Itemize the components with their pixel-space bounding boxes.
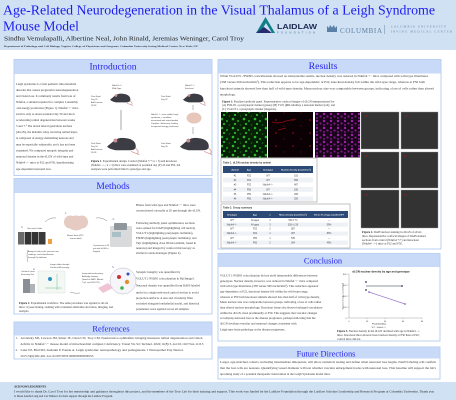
- panel: results: [218, 60, 441, 249]
- methods text: VGLUT1 /PSD95 colocalization in Fiji/ImageJ.: [136, 276, 195, 280]
- workflow step numbers: [21, 212, 115, 271]
- panel: future directions: [218, 347, 440, 379]
- table 2: group summary: P50: [253, 238, 258, 240]
- workflow step numbers: 2.: [112, 218, 115, 221]
- methods text: [136, 203, 201, 311]
- workflow labels: Mouse brain (P22: [67, 234, 84, 237]
- table 2: group summary: WT: [230, 229, 234, 231]
- mouse labels: Ndufs4 +/+: [112, 85, 123, 87]
- heading: methods: Methods: [96, 182, 130, 192]
- table 2: group summary: KO as % of age-matched WT: [314, 214, 344, 216]
- workflow labels: Tuj1, and VGLUT1): [82, 282, 100, 284]
- table 2: group summary: —: [328, 238, 331, 240]
- table 1: nuclear density by animal: Ndufs4−/−: [263, 199, 274, 201]
- table 2: group summary: 83%: [327, 233, 331, 235]
- heading: introduction: Introduction: [90, 62, 137, 72]
- authors: Sindhu Vemulapalli, Albertine Neal, John Rinald, Jeremias Weninger, Carol Troy: [4, 36, 245, 42]
- step 4 microscope: [23, 279, 30, 293]
- workflow step numbers: 4.: [33, 268, 35, 271]
- reference list: deficits in Ndufs4−/− mouse model of mitochondrial complex I deficiency. Transl Vis Sci Technol. 2022;11(8):3. doi:10.1167/tvst.11.8.3: [20, 342, 204, 346]
- figure 5 caption: mice. Knockout mice showed lower nuclear density at P50 than at P22;: [337, 333, 420, 337]
- workflow labels: Cryosection at 20: [93, 244, 110, 247]
- heading: future directions: Future Directions: [297, 350, 355, 358]
- figure 5: nuclear density line chart: 600: [343, 285, 347, 287]
- mouse labels: Knockout: [185, 87, 194, 90]
- control mouse P22: [110, 94, 133, 105]
- reference list: Lake NJ, Bird MJ, Isohanni P, Paetau A. Leigh syndrome: neuropathology and pathogenesis. J Neuropathol Exp Neurol.: [20, 348, 184, 353]
- conclusion text: than altered nuclear morphology. Knockout tissue also showed enlarged vasculature: [220, 306, 323, 310]
- workflow labels: Confocal Laser: [21, 270, 35, 273]
- knockout mouse P50: [180, 138, 212, 155]
- table 2: group summary: All ages: [251, 219, 260, 222]
- brain icon: [186, 112, 202, 124]
- mouse labels: Post Natal: [161, 142, 171, 145]
- figure 5: nuclear density line chart: 200: [343, 307, 347, 309]
- workflow labels: Image slides through: [50, 263, 70, 266]
- reference list: 2.: [16, 348, 18, 352]
- heading: conclusion: Conclusion: [304, 256, 343, 266]
- methods text: Tuj1 (highlighting class III beta-tubulin, found in: [136, 241, 197, 246]
- mouse labels: Adult mouse: [91, 148, 103, 151]
- table 2: group summary: Table 2. Group summary: [223, 206, 253, 210]
- logo: Columbia University Irving Medical Center: COLUMBIA: [340, 27, 382, 35]
- table 2: group summary: 49%: [327, 242, 331, 244]
- methods text: VGLUT1 (highlighting presynaptic terminals),: [136, 231, 193, 236]
- figure 4 caption: (Ndufs4 −/−) mice at P22 and P50.: [362, 242, 403, 246]
- table 1: nuclear density by animal: #1: [234, 176, 237, 178]
- figure 4 caption: [362, 230, 426, 246]
- step 2 cryostat: [110, 226, 132, 247]
- conclusion text: whereas at P50 both knockout animals showed less than half of wild-type density.: [220, 295, 320, 299]
- table 2: group summary: 3: [269, 220, 271, 222]
- table 2: group summary: 587: [291, 229, 296, 231]
- affiliation: Department of Pathology and Cell Biology, Vagelos College of Physicians and Surgeons, Columbia University Irving Medical Center, New York, NY: [4, 45, 198, 48]
- intro text: (dLGN), the thalamic relay receiving retinal input,: [16, 130, 78, 135]
- table 1: nuclear density by animal: Nuclear density (nuclei/mm²): [281, 168, 311, 172]
- logo: Columbia University Irving Medical Center: [327, 24, 452, 35]
- future directions text: that the lost cells are neurons. Quantifying vessel diameter will test whether vascular enlargement tracks with neuronal loss. This baseline will support the lab's: [220, 366, 437, 370]
- conclusion text: [220, 274, 323, 332]
- methods text: projection artifacts. A size and circularity filter: [136, 296, 193, 300]
- intro text: Ndufs4−/− mice at P22 and P50, hypothesizing: [16, 160, 74, 165]
- knockout mouse P22: [183, 94, 206, 105]
- methods text: nuclei in a single mid-stack optical section to avoid: [136, 290, 199, 294]
- mouse labels: Adult mouse: [91, 101, 103, 104]
- arrow: knockout timeline: [192, 105, 194, 134]
- logo: Columbia University Irving Medical Center: COLUMBIA UNIVERSITY: [391, 24, 447, 28]
- table 2: group summary: P22: [253, 229, 258, 231]
- acknowledgments band: to Dean Ariella Lang and Cat Wallace for their support through the Laidlaw Program.: [14, 394, 113, 398]
- figure 5: nuclear density line chart: 80: [421, 321, 424, 323]
- figure 3 caption: (A) PSD-95, a postsynaptic marker (green); (B) TUJ1 (βIII-tubulin), a neuronal marker (red); and: [222, 103, 335, 107]
- intro text: is composed of energy-demanding neurons and: [16, 136, 74, 140]
- step 3 antibody staining: [110, 268, 136, 294]
- table 2: group summary: 1: [269, 233, 271, 235]
- intro text: Ndufs4, a subunit required for complex I assembly: [16, 100, 78, 105]
- step 3 slide: [98, 283, 113, 293]
- table 2: group summary: WT: [230, 238, 234, 240]
- table 1: nuclear density by animal: P50: [247, 194, 252, 196]
- mouse labels: Post Natal: [91, 95, 101, 98]
- table 1: nuclear density by animal: #6: [234, 199, 237, 201]
- figure 1 caption: [91, 159, 180, 171]
- title: Mouse Model: [3, 18, 79, 34]
- mouse labels: Post Natal: [91, 142, 101, 145]
- table 2: group summary: P22: [253, 233, 258, 235]
- figure 5: nuclear density line chart: 400: [343, 296, 347, 298]
- conclusion text: Leigh-type brain pathology as the disease progresses.: [220, 328, 285, 332]
- conclusion text: VGLUT1 /PSD95 colocalization did not yield interpretable differences between: [220, 274, 318, 278]
- intro text: 5 and 7.¹ The dorsal lateral geniculate nucleus: [16, 124, 73, 128]
- logo: Laidlaw Foundation: [256, 17, 317, 34]
- conclusion text: dLGN develops vascular and neuronal changes consistent with: [220, 322, 297, 326]
- figure 4 caption: mice. Representative confocal images of DAPI-stained: [362, 234, 426, 238]
- table 1: nuclear density by animal: #4: [234, 190, 237, 192]
- table 2: group summary: 2: [269, 229, 271, 231]
- results text: While VGLUT1 /PSD95 colocalization showed no interpretable results, nuclear density was reduced in Ndufs4−/− mice compared with wild-type littermates: [220, 74, 429, 79]
- methods text: Neuronal density was quantified from DAPI-labeled: [136, 284, 200, 288]
- intro text: Leigh syndrome is a fatal pediatric mitochondrial: [16, 82, 76, 86]
- title: [3, 2, 435, 34]
- step 5 image panels: [18, 232, 24, 244]
- table 1: nuclear density by animal: P22: [247, 180, 252, 182]
- mouse labels: associated with mitochondrial: [151, 119, 179, 122]
- methods text: neurons) and imaged by confocal microscopy as: [136, 246, 196, 250]
- control mouse P50: [107, 138, 139, 155]
- table 1: nuclear density by animal: Ndufs4−/−: [263, 194, 274, 196]
- intro text: and vision loss. It commonly results from loss of: [16, 94, 76, 98]
- figure 5: nuclear density line chart: WT · Ndufs4−/−: [372, 327, 387, 329]
- table 2: group summary: WT: [230, 220, 234, 222]
- intro text: and energy production (Figure 1). Ndufs4−/− mice: [16, 106, 79, 110]
- figure 2 caption: mice: cryosectioning, staining with consistent antibodies and ratios, imaging, and: [19, 305, 114, 309]
- table 1: nuclear density by animal: WT: [266, 190, 270, 192]
- table 2: group summary: 487: [291, 233, 296, 235]
- table 2: group summary: Genotype: [227, 214, 238, 216]
- table 1: nuclear density by animal: Age: [247, 168, 252, 172]
- table 2: group summary: 569 ± 73: [289, 220, 298, 222]
- mouse labels: Day 22: [161, 99, 168, 101]
- table 2: group summary: [221, 204, 350, 248]
- figure 2: workflow: [18, 212, 136, 313]
- conclusion text: Mean nuclear size was comparable between groups, indicating a loss of cells rather: [220, 300, 321, 305]
- workflow labels: Antibody staining: [82, 275, 99, 278]
- conclusion text: genotypes. Nuclear density, however, was reduced in Ndufs4−/− mice compared: [220, 279, 319, 284]
- table 1: nuclear density by animal: Table 1. dLGN nuclear density by animal: [223, 162, 271, 164]
- workflow arrows: [27, 218, 107, 293]
- acknowledgments band: ACKNOWLEDGMENTS: [14, 384, 47, 388]
- table 1: nuclear density by animal: Animal: [231, 168, 239, 172]
- mouse labels: Ndufs4 −/− mice exhibit Leigh: [151, 113, 179, 116]
- table 1: nuclear density by animal: Ndufs4−/−: [263, 185, 274, 187]
- workflow labels: through Fiji software: [28, 256, 48, 259]
- figure 3 caption: (C) VGLUT1, a presynaptic marker (magenta).: [222, 107, 277, 111]
- table 1: nuclear density by animal: 259: [294, 199, 299, 201]
- panel: introduction: [14, 60, 212, 176]
- methods text: cryosectioned coronally at 20 µm through the dLGN.: [136, 208, 201, 212]
- workflow labels: Scanning Unit: [21, 273, 34, 276]
- table 1: nuclear density by animal: 658: [294, 180, 299, 182]
- table 1: nuclear density by animal: 268: [294, 194, 299, 196]
- panel: references: [14, 322, 212, 359]
- table 1: nuclear density by animal: #3: [234, 185, 237, 187]
- table 2: group summary: 59%: [327, 224, 331, 226]
- methods text: were stained for DAPI (highlighting cell nuclei),: [136, 226, 196, 231]
- mouse labels: Post Natal: [161, 95, 171, 98]
- workflow labels: transcardial): [70, 237, 82, 240]
- logo: Columbia University Irving Medical Center: IRVING MEDICAL CENTER: [391, 30, 452, 34]
- table 2: group summary: All ages: [251, 224, 260, 226]
- reference list: 2015;74(6):482-492. doi:10.1097/NEN.0000000000000195: [20, 354, 94, 358]
- table 2: group summary: 535: [291, 238, 296, 240]
- workflow labels: Sagittal: [93, 250, 100, 253]
- methods text: PSD95 (highlighting postsynaptic terminals), and: [136, 236, 197, 241]
- table 2: group summary: Mean density (nuclei/mm²): [279, 214, 307, 216]
- table 2: group summary: 1: [269, 238, 271, 240]
- heading: results: Results: [309, 61, 338, 72]
- figure 5 caption: [337, 329, 421, 341]
- intro text: accelerating retinal degeneration between weeks: [16, 118, 76, 122]
- figure 5 caption: control mice did not.: [337, 337, 361, 341]
- reference list: 1.: [16, 336, 18, 340]
- methods text: excluded elongated endothelial nuclei, and identical: [136, 302, 199, 306]
- figure 3 caption: [222, 100, 335, 111]
- table 1: nuclear density by animal: P50: [247, 199, 252, 201]
- future directions text: [220, 360, 437, 376]
- figure 4: DAPI micrographs: [361, 112, 438, 228]
- workflow labels: µm with dLGN in: [93, 247, 109, 250]
- mouse labels: 18-28: [91, 152, 97, 154]
- table 1: nuclear density by animal: P50: [247, 190, 252, 192]
- workflow labels: Confocal Microscopy: [50, 266, 70, 269]
- workflow labels: Use nuclei Grids: [27, 227, 42, 230]
- methods text: parameters were applied across all samples.: [136, 307, 190, 311]
- mouse labels: to impaired energy production: [151, 125, 179, 128]
- figure 5: nuclear density line chart: [342, 270, 424, 329]
- mouse labels: Day 22: [91, 99, 98, 101]
- panel: conclusion: [218, 254, 440, 341]
- intro text: survive only to about postnatal day 50 and show: [16, 112, 76, 116]
- mouse labels: 18-28: [91, 105, 97, 107]
- figure 2 caption: analysis.: [19, 309, 29, 313]
- table 1: nuclear density by animal: #2: [234, 180, 237, 182]
- results text: (338 versus 569 nuclei/mm²). This reduction appears to be age-dependent: at P22, knockout density fell within the wild-type range, whereas at P50 both: [220, 80, 426, 85]
- figure 1 caption: Figure 1. Experimental design. Control (Ndufs4 +/+; n = 3) and knockout: [91, 159, 177, 163]
- figure 5: nuclear density line chart: 0: [345, 318, 347, 320]
- intro text: age-dependent neuronal loss.: [16, 167, 52, 171]
- mouse labels: Wild-Type: [112, 88, 122, 90]
- table 1: nuclear density by animal: 535: [294, 190, 299, 192]
- figure 5: nuclear density line chart: 40: [384, 321, 387, 323]
- workflow labels: (Hoechst DAPI, Mitotrk,: [82, 278, 104, 281]
- mouse labels: syndrome, a condition: [151, 116, 172, 119]
- acknowledgments band: I would like to thank Dr. Carol Troy for her mentorship and guidance throughout this project, and the members of the Troy Lab for their training and support. This work was funded by the Laidlaw Foundation through the Laidlaw Scholars Leadership and Research Program at Columbia University. Thank you: [14, 390, 435, 394]
- figure 1: experimental design: [91, 85, 212, 171]
- figure 5: nuclear density line chart: 20: [366, 321, 369, 323]
- figure 4 caption: Figure 4. DAPI nuclear staining in dLGN of all six: [362, 230, 422, 234]
- figure 2 caption: [19, 301, 114, 313]
- step 1 brain: [64, 216, 88, 230]
- mouse labels: [91, 85, 196, 154]
- intro text: [16, 82, 79, 171]
- table 2: group summary: 2: [269, 242, 271, 244]
- workflow step numbers: 1.: [64, 212, 67, 215]
- reference list: Arviatzky MJ, Lawson JM, Smart JE, Chen CW, Troy CM. Noninvasive ophthalmic imaging measures retinal degeneration and vision: [20, 336, 203, 341]
- arrow: control timeline: [120, 110, 122, 130]
- conclusion text: with wild-type littermates (338 versus 569 nuclei/mm²). This reduction appeared: [220, 284, 319, 288]
- workflow labels: Analysis with nuclei, percent area: [28, 250, 60, 253]
- mouse labels: Ndufs4 −/−: [185, 85, 196, 87]
- table 1: nuclear density by animal: [221, 158, 317, 202]
- workflow step numbers: 5.: [21, 226, 23, 229]
- methods text: Synaptic integrity was quantified by: [136, 270, 181, 274]
- figure 2 caption: Figure 2. Experimental workflow. The same procedure was applied to all six: [19, 301, 109, 305]
- header banner: [0, 0, 456, 50]
- figure 4 caption: sections from control (Ndufs4 +/+) and knockout: [362, 238, 419, 242]
- logo: Laidlaw Foundation: LAIDLAW: [277, 24, 317, 31]
- table 2: group summary: P50: [253, 242, 258, 244]
- table 1: nuclear density by animal: WT: [266, 180, 270, 182]
- future directions text: upcoming study of a potential therapeutic intervention in the Leigh Syndrome model mice.: [220, 372, 331, 376]
- figure 3: confocal images: [221, 112, 360, 158]
- results text: knockout animals showed less than half of wild-type density. Mean nuclear size was comparable between groups, indicating a loss of cells rather than altered: [220, 86, 435, 91]
- table 2: group summary: n: [269, 214, 271, 216]
- workflow labels: Immunohistochemistry:: [82, 272, 104, 275]
- mouse labels: Day 50: [91, 146, 98, 148]
- table 2: group summary: 338 ± 130: [288, 224, 299, 226]
- figure 3 caption: Figure 3. Finalized antibody panel. Representative confocal images of dLGN immunostained for: [222, 100, 334, 104]
- table 1: nuclear density by animal: 487: [294, 185, 299, 187]
- conclusion text: age-dependent: at P22, knockout density fell within the wild-type range,: [220, 290, 308, 294]
- future directions text: Larger, age-matched cohorts, including intermediate timepoints, will allow statistical testing and define when neuronal loss begins. NeuN labeling will confirm: [220, 360, 437, 365]
- logo: Laidlaw Foundation: FOUNDATION: [277, 30, 315, 34]
- figure 5: nuclear density line chart: 0: [348, 321, 350, 323]
- figure 5: nuclear density line chart: 60: [402, 321, 405, 323]
- workflow labels: [21, 227, 110, 284]
- acknowledgments band: [0, 382, 456, 400]
- table 2: group summary: —: [328, 229, 331, 231]
- table 1: nuclear density by animal: Genotype: [263, 168, 274, 172]
- figure 5: nuclear density line chart: Nuclear density (nuclei/mm²): [342, 282, 344, 309]
- table 2: group summary: —: [328, 220, 331, 222]
- step 4 confocal image: [38, 271, 65, 293]
- table 2: group summary: Ndufs4−/−: [227, 242, 238, 244]
- panel: methods: [14, 178, 212, 314]
- results text: [220, 74, 435, 96]
- methods text: Brains from wild-type and Ndufs4−/− mice were: [136, 203, 196, 207]
- figure 5: nuclear density line chart: 800: [343, 274, 347, 276]
- intro text: examined. We compared synaptic integrity and: [16, 148, 74, 152]
- results text: morphology.: [220, 92, 236, 96]
- reference list: [16, 336, 204, 358]
- table 1: nuclear density by animal: P22: [247, 176, 252, 178]
- workflow step numbers: 3.: [112, 266, 114, 269]
- mouse labels: Day 50: [161, 146, 168, 148]
- table 1: nuclear density by animal: WT: [266, 176, 270, 178]
- figure 5: nuclear density line chart: Postnatal Day: [372, 322, 387, 326]
- intro text: may be especially vulnerable, yet it has not been: [16, 142, 76, 147]
- title: Age-Related Neurodegeneration in the Visual Thalamus of a Leigh Syndrome: [3, 2, 435, 18]
- table 2: group summary: Ndufs4−/−: [227, 224, 238, 226]
- methods text: Following antibody panel optimization, sections: [136, 221, 196, 226]
- table 1: nuclear density by animal: 515: [294, 176, 299, 178]
- intro text: disorder that causes progressive neurodegeneration: [16, 88, 79, 92]
- table 1: nuclear density by animal: P22: [247, 185, 252, 187]
- table 2: group summary: Ndufs4−/−: [227, 233, 238, 235]
- workflow labels: readings, and colocalization: [28, 253, 54, 256]
- figure 1 caption: (Ndufs4 −/−; n = 3) mice were examined at postnatal day (P) 22 and P50. All: [91, 163, 180, 167]
- table 2: group summary: 3: [269, 224, 271, 226]
- table 2: group summary: Age: [253, 214, 258, 216]
- figure 5 caption: Figure 5. Nuclear density in the dLGN declined with age in Ndufs4 −/−: [337, 329, 421, 333]
- mouse labels: Complex I deficiency, leading: [151, 123, 179, 125]
- conclusion text: within the dLGN, most prominently at P50. This suggests that vascular changes: [220, 311, 318, 316]
- figure 1 caption: analyses were performed blind to genotype and age.: [91, 167, 151, 171]
- intro text: neuronal density in the dLGN of wild-type and: [16, 154, 74, 158]
- table 1: nuclear density by animal: #5: [234, 194, 237, 196]
- methods text: stitched z-stack montages (Figure 2).: [136, 251, 181, 255]
- table 2: group summary: 264: [291, 242, 296, 244]
- figure 5: nuclear density line chart: dLGN nuclear density by age and genotype: [352, 270, 410, 274]
- heading: references: References: [92, 324, 130, 334]
- conclusion text: accompany neuronal loss as the disease progresses, perhaps indicating that the: [220, 316, 316, 321]
